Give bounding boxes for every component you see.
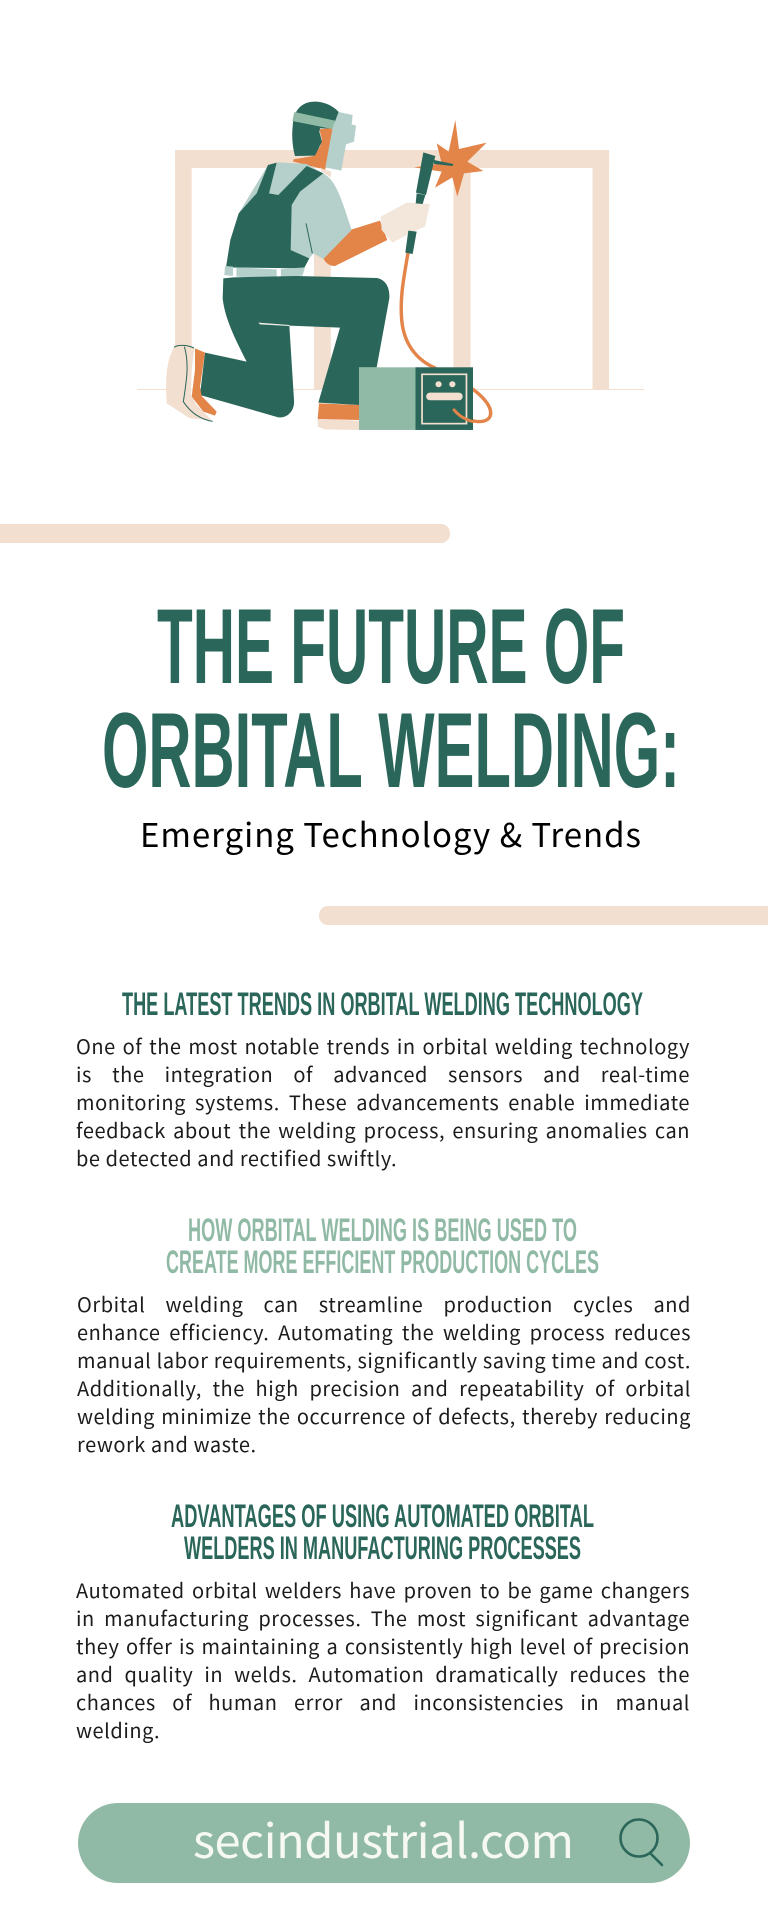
spark [414, 120, 487, 197]
text block: latest trends: feedback about the welding process, ensuring anomalies can [76, 1115, 690, 1144]
text block: advantages of automated welders: Automated orbital welders have proven to be game changers [76, 1575, 690, 1604]
text block: efficient production cycles [77, 1289, 691, 1458]
icon: magnifying glass [619, 1818, 664, 1866]
welder upper body [226, 102, 487, 268]
text block: latest trends [76, 1031, 690, 1172]
overalls bib [226, 163, 323, 268]
illustration: welder kneeling at a frame [137, 102, 644, 430]
text block: latest trends: monitoring systems. These advancements enable immediate [76, 1087, 690, 1116]
welder lower body [166, 276, 389, 430]
heading: advantages of automated welders [171, 1498, 594, 1566]
subtitle: Emerging Technology & Trends [140, 810, 641, 857]
forearm [323, 221, 387, 266]
text block: advantages of automated welders: and quality in welds. Automation dramatically reduces the [76, 1659, 690, 1688]
text block: efficient production cycles: Orbital welding can streamline production cycles and [77, 1289, 691, 1318]
glove [381, 203, 430, 243]
top decorative bar [0, 524, 450, 543]
website search pill [78, 1803, 690, 1883]
heading: efficient production cycles [166, 1212, 599, 1280]
welding torch [405, 152, 453, 254]
text block: advantages of automated welders: in manufacturing processes. The most significant advantage [76, 1603, 690, 1632]
welding machine [359, 367, 473, 430]
rear boot [192, 348, 217, 416]
belt [224, 266, 305, 279]
face shield [325, 112, 356, 171]
hair and cap [292, 102, 339, 156]
welding cable [401, 253, 491, 422]
background frame [137, 150, 644, 390]
bottom decorative bar [319, 906, 768, 925]
text block: latest trends: is the integration of advanced sensors and real-time [76, 1059, 690, 1088]
headband [292, 112, 335, 129]
text block: efficient production cycles: manual labor requirements, significantly saving time and cost. [77, 1345, 691, 1374]
front boot [318, 403, 359, 420]
text block: efficient production cycles: rework and waste. [77, 1429, 257, 1458]
text block: advantages of automated welders [76, 1575, 690, 1744]
shirt crease [306, 223, 312, 253]
text block: latest trends: be detected and rectified swiftly. [76, 1143, 397, 1172]
shirt [239, 162, 352, 259]
text block: advantages of automated welders: chances of human error and inconsistencies in manual [76, 1687, 690, 1716]
text block: efficient production cycles: enhance efficiency. Automating the welding process reduces [77, 1317, 691, 1346]
title [102, 590, 680, 800]
trousers [200, 276, 389, 417]
text block: advantages of automated welders: they offer is maintaining a consistently high level of precision [76, 1631, 690, 1660]
text block: latest trends: One of the most notable trends in orbital welding technology [76, 1031, 690, 1060]
text block: advantages of automated welders: welding. [76, 1715, 160, 1744]
neck and face [293, 127, 333, 170]
text block: efficient production cycles: welding minimize the occurrence of defects, thereby reducing [77, 1401, 691, 1430]
text block: efficient production cycles: Additionally, the high precision and repeatability of orbital [77, 1373, 691, 1402]
